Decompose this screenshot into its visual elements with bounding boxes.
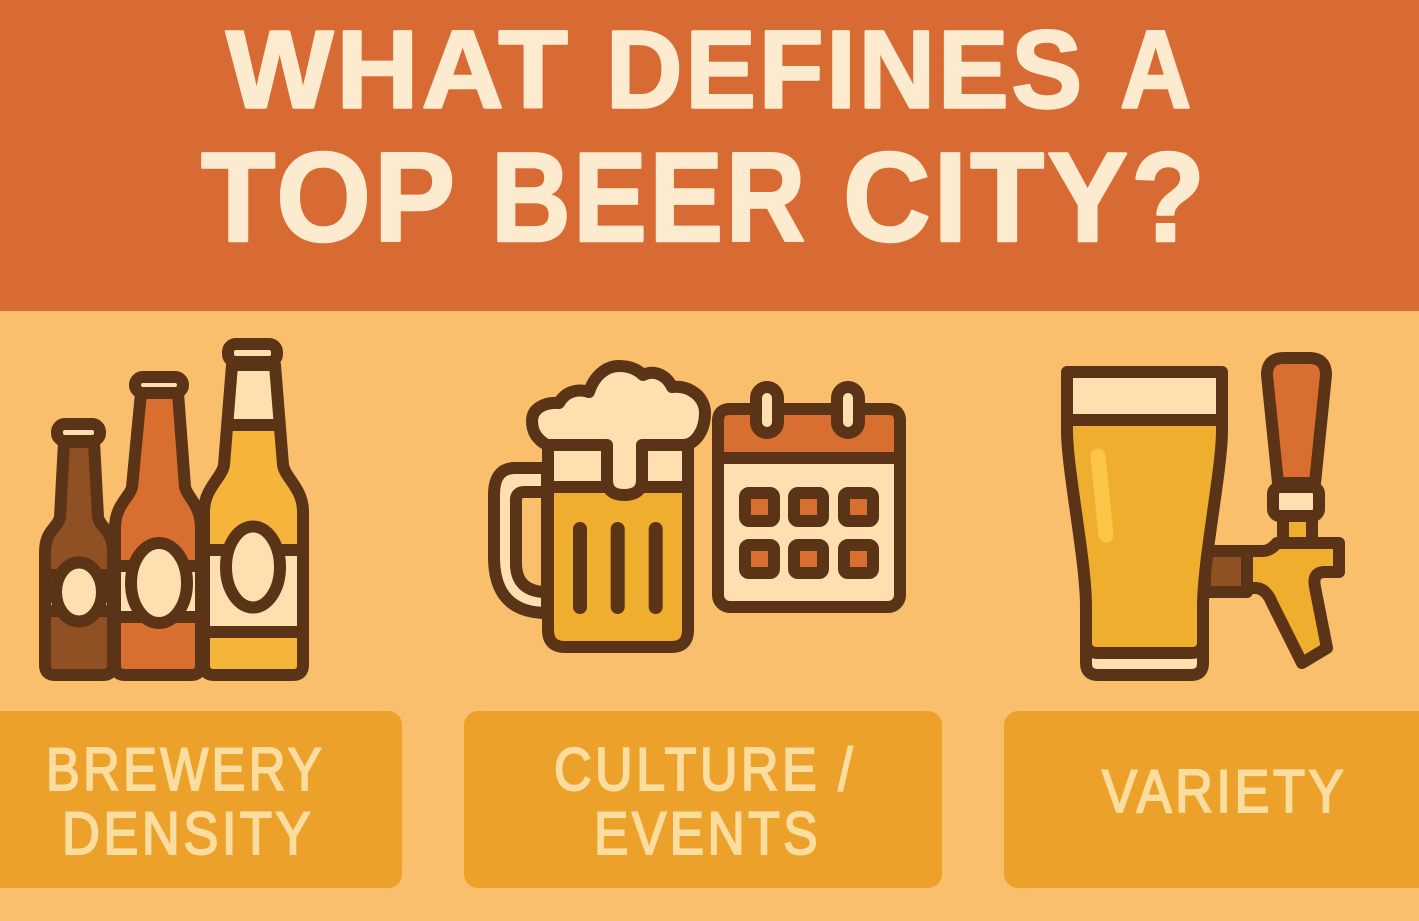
icon: beer mug [494, 366, 705, 647]
mug ribs [580, 529, 656, 607]
title [201, 8, 1208, 268]
glass highlight [1098, 456, 1106, 535]
label text: EVENTS [594, 800, 821, 867]
tap stem [1283, 515, 1312, 545]
icon: small brown bottle [40, 424, 120, 675]
tap collar [1273, 487, 1319, 516]
mug handle [494, 468, 547, 613]
title: CITY? [843, 126, 1208, 268]
icon: pint glass [1060, 372, 1230, 677]
label text [554, 736, 856, 867]
label text: VARIETY [1102, 758, 1347, 825]
foam [532, 366, 705, 495]
label box: variety [1004, 711, 1419, 888]
label text [46, 736, 325, 867]
tap handle [1267, 358, 1326, 483]
label text: DENSITY [62, 800, 314, 867]
label box: brewery density [0, 711, 402, 888]
icon: beer tap [1205, 358, 1339, 663]
panel: culture and events [464, 366, 942, 888]
mug glass top [548, 445, 688, 487]
title: A [1120, 8, 1194, 132]
icon: tall amber bottle [200, 344, 310, 675]
icon: medium orange bottle [110, 377, 210, 675]
title: TOP [201, 126, 458, 268]
label text: CULTURE / [554, 736, 856, 803]
title: WHAT [226, 8, 571, 132]
title banner [0, 0, 1419, 311]
label text: BREWERY [46, 736, 325, 803]
tap connector [1205, 551, 1247, 592]
icon: three beer bottles [40, 344, 310, 675]
mug body [548, 445, 688, 647]
icon: calendar [718, 387, 900, 607]
title: BEER [491, 126, 808, 268]
title: DEFINES [606, 8, 1085, 132]
page background [0, 311, 1419, 921]
tap spout [1247, 543, 1339, 663]
panel: variety [1004, 358, 1419, 888]
panel: brewery density [0, 344, 402, 888]
label box: culture and events [464, 711, 942, 888]
